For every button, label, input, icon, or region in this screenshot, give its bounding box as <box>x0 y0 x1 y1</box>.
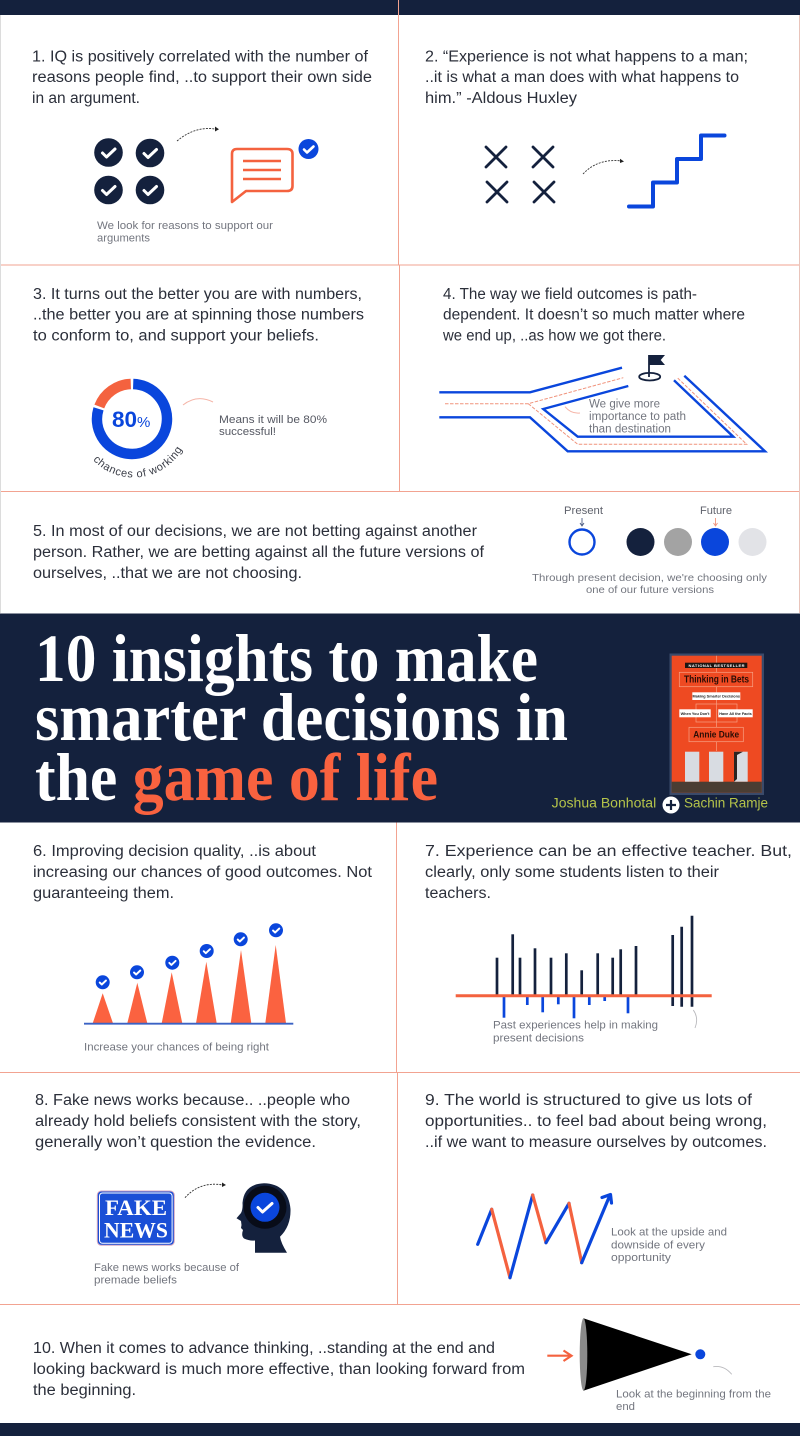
text: insight 2: 2. “Experience is not what happens to a man; <box>425 48 748 66</box>
caption: insight 9: Look at the upside and <box>611 1227 727 1239</box>
chart: 80% donut: chances of working <box>94 446 183 478</box>
icon: fake news stamp <box>97 1191 174 1245</box>
authors: Joshua Bonhotal <box>552 796 656 811</box>
text: insight 10 <box>33 1340 525 1399</box>
panel: insight 2 <box>425 48 748 206</box>
book cover: When You Don't <box>681 712 710 716</box>
text: insight 6: 6. Improving decision quality, ..is about <box>33 843 317 860</box>
text: insight 10: looking backward is much more effective, than looking forward from <box>33 1361 525 1378</box>
caption: insight 10: Look at the beginning from the <box>616 1388 771 1400</box>
panel: insight 5 <box>33 505 768 596</box>
caption: insight 1 <box>97 220 273 245</box>
caption: insight 8 <box>94 1262 240 1286</box>
caption: insight 10: end <box>616 1401 635 1413</box>
icon: head with check <box>236 1183 291 1253</box>
caption: insight 5 <box>532 572 768 596</box>
title: 10 insights to make <box>35 620 538 696</box>
text: insight 1: reasons people find, ..to support their own side <box>32 69 372 86</box>
text: insight 3: ..the better you are at spinning those numbers <box>33 306 364 324</box>
book cover: NATIONAL BESTSELLER <box>688 663 745 668</box>
caption: insight 3: successful! <box>219 426 276 438</box>
icon: cone and dot <box>580 1318 705 1391</box>
text: insight 6: increasing our chances of good outcomes. Not <box>33 864 373 881</box>
diagram: present and future circles <box>564 505 766 556</box>
icon: fake news stamp: NEWS <box>104 1218 168 1243</box>
arrow: curved to stairs <box>583 159 624 174</box>
panel: insight 10 <box>33 1318 771 1413</box>
text: insight 7: 7. Experience can be an effective teacher. But, <box>425 843 792 860</box>
panel: insight 1 <box>32 48 372 245</box>
text: insight 4: we end up, ..as how we got there. <box>442 328 666 344</box>
caption: insight 4: We give more <box>589 398 660 410</box>
title: the game of life <box>35 739 438 815</box>
icon: flag <box>639 355 665 381</box>
text: insight 10: 10. When it comes to advance thinking, ..standing at the end and <box>33 1340 495 1357</box>
icon: blue stairs <box>629 136 724 206</box>
text: insight 2: him.” -Aldous Huxley <box>425 90 577 107</box>
text: insight 7: clearly, only some students listen to their <box>425 864 719 881</box>
chart: rising triangles <box>84 923 293 1024</box>
icon: fake news stamp: FAKE <box>105 1195 167 1220</box>
text: insight 7 <box>425 843 792 902</box>
top bar <box>0 0 800 15</box>
text: insight 4 <box>442 286 745 344</box>
caption: insight 1: We look for reasons to support our <box>97 220 273 232</box>
caption: insight 8: Fake news works because of <box>94 1262 240 1274</box>
caption: insight 4 <box>589 398 686 436</box>
icon: four crosses <box>486 147 554 202</box>
caption: insight 5: Through present decision, we're choosing only <box>532 572 768 584</box>
icon: speech bubble with check <box>232 139 318 202</box>
text: insight 5: ourselves, ..that we are not choosing. <box>33 565 302 582</box>
caption: insight 9: opportunity <box>611 1252 672 1264</box>
caption: insight 7: Past experiences help in making <box>493 1019 658 1031</box>
text: insight 1: 1. IQ is positively correlated with the number of <box>32 48 369 66</box>
diagram: path to flag <box>439 368 765 451</box>
caption: insight 4: than destination <box>589 424 671 436</box>
authors <box>552 796 768 814</box>
text: insight 5: person. Rather, we are betting against all the future versions of <box>33 544 485 561</box>
text: insight 2 <box>425 48 748 107</box>
arrow: orange pointing to cone <box>547 1350 572 1361</box>
caption: insight 3: Means it will be 80% <box>219 414 327 426</box>
chart: zigzag arrow <box>478 1194 612 1278</box>
text: insight 4: dependent. It doesn’t so much matter where <box>443 306 745 324</box>
banner <box>0 614 800 822</box>
arrow: thin curve <box>713 1366 732 1374</box>
text: insight 10: the beginning. <box>33 1382 136 1399</box>
text: insight 5 <box>33 523 485 582</box>
caption: insight 9: downside of every <box>611 1239 706 1251</box>
chart: experience bars <box>456 916 712 1018</box>
text: insight 3: 3. It turns out the better you are with numbers, <box>33 286 362 303</box>
arrow: thin curve <box>693 1010 697 1028</box>
chart: 80% donut <box>92 378 183 478</box>
text: insight 6 <box>33 843 373 902</box>
caption: insight 6: Increase your chances of being right <box>84 1042 269 1054</box>
text: insight 9 <box>425 1092 767 1151</box>
caption: insight 7 <box>493 1019 658 1045</box>
book cover: Annie Duke <box>693 730 739 741</box>
text: insight 4: 4. The way we field outcomes is path- <box>443 286 697 303</box>
book cover: Thinking in Bets <box>684 675 749 686</box>
arrow: curved pink <box>183 399 213 405</box>
text: insight 8: already hold beliefs consistent with the story, <box>35 1113 361 1130</box>
authors: Sachin Ramje <box>684 796 768 811</box>
panel: insight 4 <box>439 286 765 451</box>
title: smarter decisions in <box>35 679 568 755</box>
caption: insight 10 <box>616 1388 771 1413</box>
text: insight 5: 5. In most of our decisions, we are not betting against another <box>33 523 477 540</box>
book cover: Have All the Facts <box>719 712 752 716</box>
bottom bar <box>0 1423 800 1436</box>
icon: four check marks <box>94 138 164 204</box>
panel: insight 7 <box>425 843 792 1045</box>
text: insight 9: opportunities.. to feel bad about being wrong, <box>425 1113 767 1130</box>
book cover <box>670 654 764 795</box>
text: insight 1 <box>32 48 372 107</box>
text: insight 1: in an argument. <box>32 90 140 107</box>
text: insight 6: guaranteeing them. <box>33 885 174 902</box>
panel: insight 3 <box>33 286 364 478</box>
caption: insight 9 <box>611 1227 727 1264</box>
text: insight 8 <box>35 1092 361 1151</box>
text: insight 3 <box>33 286 364 344</box>
text: insight 8: 8. Fake news works because.. ..people who <box>35 1092 350 1109</box>
text: insight 2: ..it is what a man does with what happens to <box>425 69 739 86</box>
panel: insight 6 <box>33 843 373 1054</box>
caption: insight 3 <box>219 414 327 438</box>
text: insight 8: generally won’t question the evidence. <box>35 1134 316 1151</box>
caption: insight 8: premade beliefs <box>94 1274 178 1286</box>
chart: 80% donut: 80% <box>112 407 150 432</box>
arrow: curved to speech bubble <box>177 126 219 141</box>
text: insight 9: 9. The world is structured to give us lots of <box>425 1092 753 1109</box>
panel: insight 8 <box>35 1092 361 1286</box>
caption: insight 4: importance to path <box>589 411 686 423</box>
text: insight 3: to conform to, and support your beliefs. <box>33 328 319 344</box>
text: insight 7: teachers. <box>425 885 491 902</box>
book cover: Making Smarter Decisions <box>693 695 740 699</box>
diagram: present and future circles: Future <box>700 505 732 517</box>
text: insight 9: ..if we want to measure ourselves by outcomes. <box>425 1134 767 1151</box>
caption: insight 1: arguments <box>97 233 150 245</box>
title <box>35 620 568 815</box>
arrow: curved to head <box>185 1182 226 1198</box>
caption: insight 5: one of our future versions <box>586 584 714 596</box>
diagram: present and future circles: Present <box>564 505 603 517</box>
caption: insight 7: present decisions <box>493 1033 585 1045</box>
panel: insight 9 <box>425 1092 767 1278</box>
